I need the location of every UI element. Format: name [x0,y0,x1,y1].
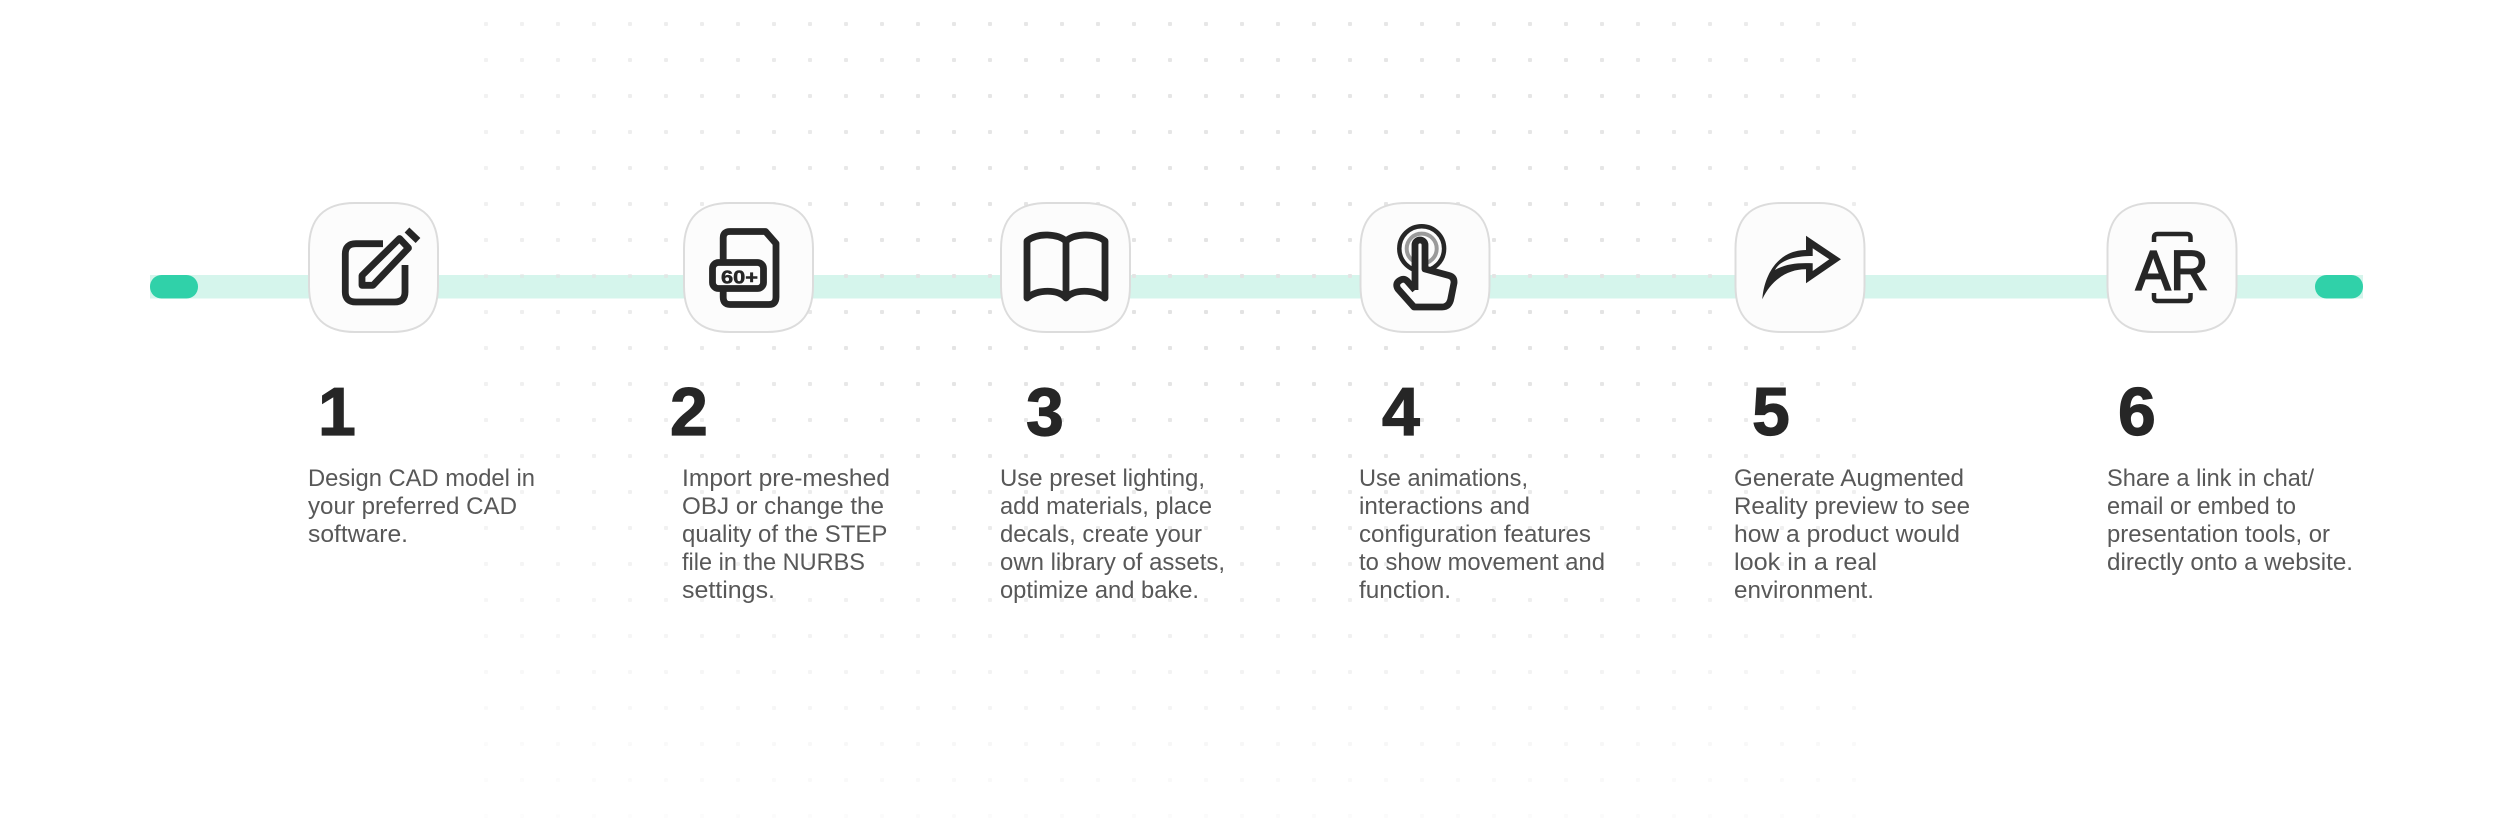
step number 5: 5 [1752,374,1790,450]
timeline end cap [2315,275,2363,298]
step 2 description: OBJ or change the [682,493,884,520]
icon: pencil on square [345,230,418,302]
step 2: import mesh [670,203,897,604]
step 6 description: email or embed to [2107,493,2296,520]
icon card 1 [309,203,438,332]
step number 3: 3 [1026,374,1064,450]
icon: AR frame: AR [2136,238,2208,301]
step 5 description: look in a real [1734,549,1877,576]
step 4 description: to show movement and [1359,549,1605,576]
step 2 description: Import pre-meshed [682,465,890,492]
step 2 description: file in the NURBS [682,549,865,576]
step 4 description: configuration features [1359,521,1591,548]
step 4 description: interactions and [1359,493,1530,520]
step 5 description: environment. [1734,577,1874,604]
step number 2: 2 [670,374,708,450]
timeline start cap [150,275,198,298]
step 4: animations [1359,203,1612,604]
icon: open book [1027,235,1105,298]
icon card 3 [1001,203,1130,332]
timeline track [150,275,2363,298]
step 3 description: add materials, place [1000,493,1212,520]
step 3: lighting and materials [1000,203,1232,604]
step 6 description: directly onto a website. [2107,549,2353,576]
step 5 description: Generate Augmented [1734,465,1964,492]
step 2 description: settings. [682,577,775,604]
step 4 description: Use animations, [1359,465,1528,492]
step 3 description: Use preset lighting, [1000,465,1205,492]
step 5 description: Reality preview to see [1734,493,1970,520]
step 5 description: how a product would [1734,521,1960,548]
step number 6: 6 [2118,374,2156,450]
step 3 description: optimize and bake. [1000,577,1199,604]
step number 4: 4 [1382,374,1420,450]
step number 1: 1 [318,374,356,450]
step 6 description: presentation tools, or [2107,521,2330,548]
icon: file with 60+ badge [712,232,776,304]
step 5: augmented reality preview [1734,203,1977,604]
dot grid background [484,22,1858,820]
icon card 2 [684,203,813,332]
icon card 4 [1360,203,1490,332]
step 1 description: Design CAD model in [308,465,535,492]
step 3 description: own library of assets, [1000,549,1225,576]
step 4 description: function. [1359,577,1451,604]
step 2 description: quality of the STEP [682,521,887,548]
icon: file with 60+ badge: 60+ [721,266,758,287]
step 6: share [2107,203,2353,576]
step 1 description: your preferred CAD [308,493,517,520]
icon: share arrow [1762,236,1841,299]
step 1: design CAD model [308,203,542,548]
step 3 description: decals, create your [1000,521,1202,548]
step 1 description: software. [308,521,408,548]
step 6 description: Share a link in chat/ [2107,465,2314,492]
icon: tapping hand [1397,226,1454,307]
icon card 5 [1736,203,1864,332]
icon card 6 [2108,203,2236,332]
